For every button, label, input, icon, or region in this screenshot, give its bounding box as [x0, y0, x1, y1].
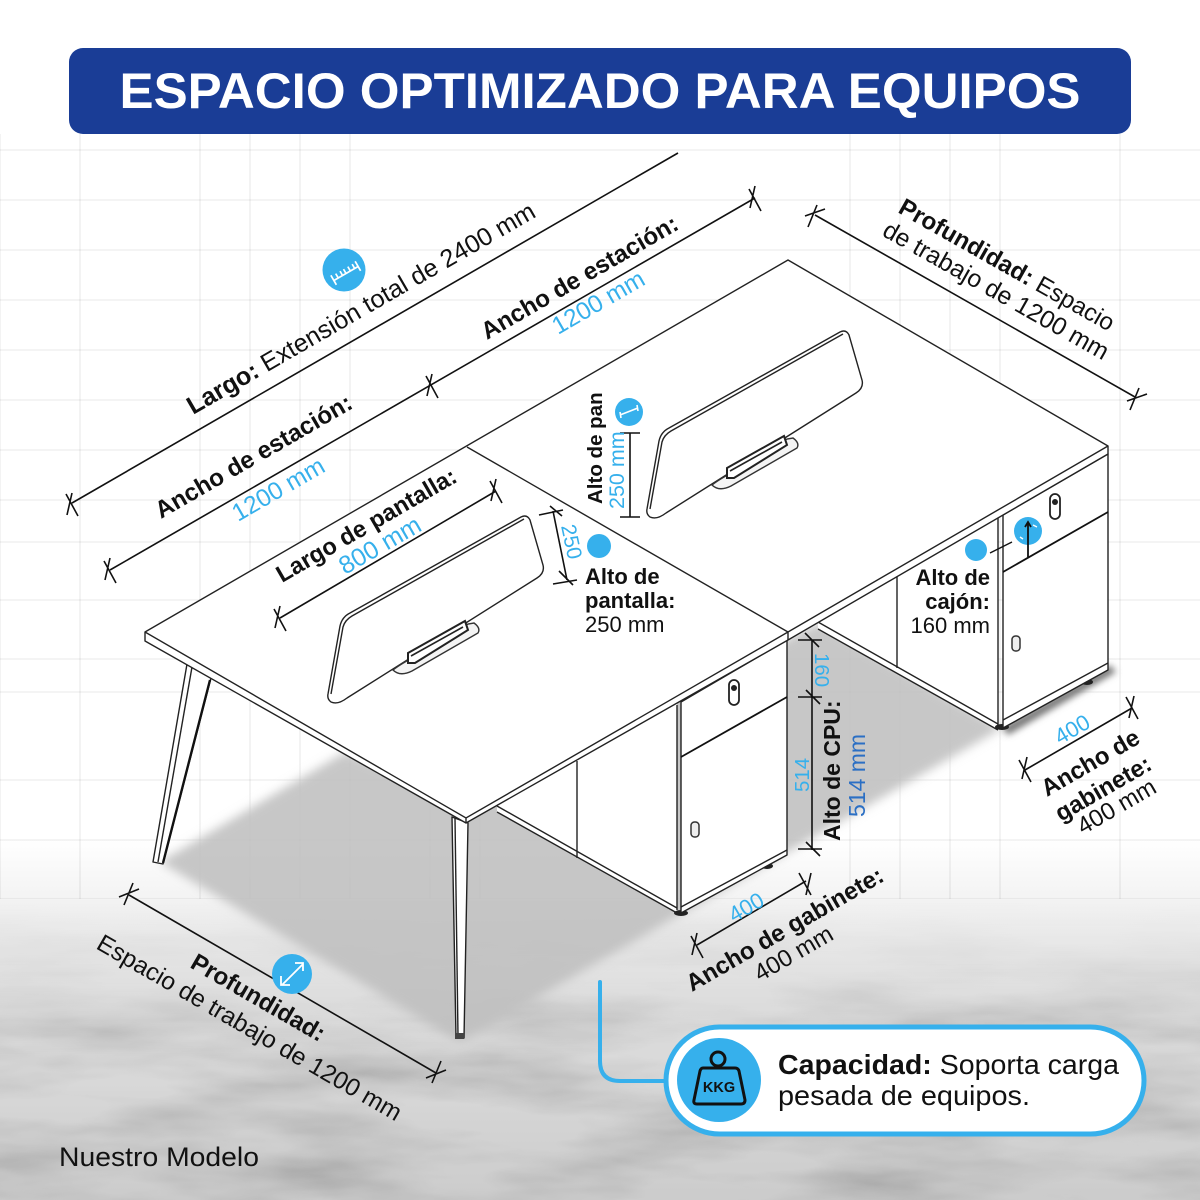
dimension: largo de pantalla [272, 464, 502, 631]
icon: dot alto de pantalla [587, 534, 611, 558]
dimension: alto de CPU: Alto de CPU: [819, 700, 845, 841]
front cabinet [497, 640, 787, 916]
label: nuestro modelo: Nuestro Modelo [59, 1142, 259, 1172]
label: Alto de pan [584, 392, 607, 504]
dimension: profundidad izquierda [92, 883, 446, 1127]
drawer handle [729, 680, 739, 705]
label: ancho derecha: Ancho de estación: [476, 210, 683, 345]
dimension: ancho de gabinete frontal: 400 mm [750, 920, 838, 987]
dimension: alto de CPU: 514 [791, 758, 814, 792]
left screen [328, 516, 543, 703]
right cabinet [818, 454, 1108, 730]
label: alto de pantalla [585, 564, 675, 637]
dimension: largo [66, 153, 678, 516]
dimension: alto de pantalla vertical [584, 392, 643, 517]
label: largo: Largo: Extensión total de 2400 mm [182, 197, 540, 420]
callout: capacidad [666, 1027, 1144, 1134]
label: alto de pantalla: 250 mm [585, 612, 664, 637]
label: Largo de pantalla: [272, 464, 462, 588]
label line 2: Espacio de trabajo de 1200 mm [92, 930, 406, 1127]
connector line [600, 982, 666, 1081]
door handle [691, 822, 699, 837]
value: 800 mm [334, 511, 426, 580]
concrete floor [0, 890, 1200, 1200]
dimension: ancho de gabinete frontal: Ancho de gabinete: [682, 862, 889, 997]
callout: alto de cajon: cajón: [925, 589, 990, 614]
dimension: ancho de gabinete derecho: gabinete: [1050, 750, 1156, 827]
drawer handle [1050, 494, 1060, 519]
text: Capacidad: Soporta carga [778, 1049, 1120, 1080]
desktop surface [145, 260, 1108, 823]
title banner [69, 48, 1131, 134]
dimension: ancho de gabinete derecho: 400 mm [1072, 773, 1161, 840]
icon: weight: KKG [703, 1080, 735, 1096]
desk illustration [145, 260, 1108, 1039]
dimension: alto de CPU: 160 [810, 653, 833, 687]
icon: weight [677, 1038, 761, 1122]
door handle [1012, 636, 1020, 651]
label: Profundidad: Espacio [894, 194, 1119, 337]
title banner: ESPACIO OPTIMIZADO PARA EQUIPOS [120, 63, 1080, 119]
label line 2: de trabajo de 1200 mm [878, 217, 1113, 366]
label: alto de pantalla: pantalla: [585, 588, 675, 613]
icon: ruler small [615, 398, 643, 426]
value: 250 mm [605, 431, 629, 509]
callout: capacidad: pesada de equipos. [778, 1080, 1030, 1111]
right screen [647, 331, 862, 518]
dimension: alto de pantalla 250: 250 [556, 522, 586, 561]
dimension: ancho de gabinete frontal: 400 [724, 887, 768, 927]
dimension: alto de CPU [791, 633, 870, 856]
label: alto de pantalla: Alto de [585, 564, 660, 589]
icon: diagonal arrow [272, 954, 312, 994]
left leg [153, 664, 211, 864]
label: ancho izquierda: Ancho de estación: [150, 389, 357, 524]
label: 1200 izquierda: 1200 mm [228, 453, 330, 527]
dimension: alto de pantalla 250 [539, 506, 586, 585]
label: 1200 derecha: 1200 mm [548, 266, 650, 340]
dimension: ancho de estacion [104, 186, 761, 583]
dimension: alto de CPU: 514 mm [844, 734, 870, 817]
callout: alto de cajon [911, 517, 1042, 638]
dimension: ancho de gabinete derecho: 400 [1050, 709, 1094, 749]
dimension: profundidad derecha [805, 194, 1147, 410]
callout: alto de cajon: 160 mm [911, 613, 990, 638]
label: Profundidad: [186, 949, 330, 1047]
icon: ruler [322, 248, 366, 292]
callout: alto de cajon: Alto de [915, 565, 990, 590]
dimension: ancho de gabinete derecho: Ancho de [1036, 724, 1145, 802]
dimension: ancho de gabinete derecho [1019, 696, 1161, 840]
front leg [452, 817, 468, 1039]
desk shadow [160, 622, 1116, 1042]
